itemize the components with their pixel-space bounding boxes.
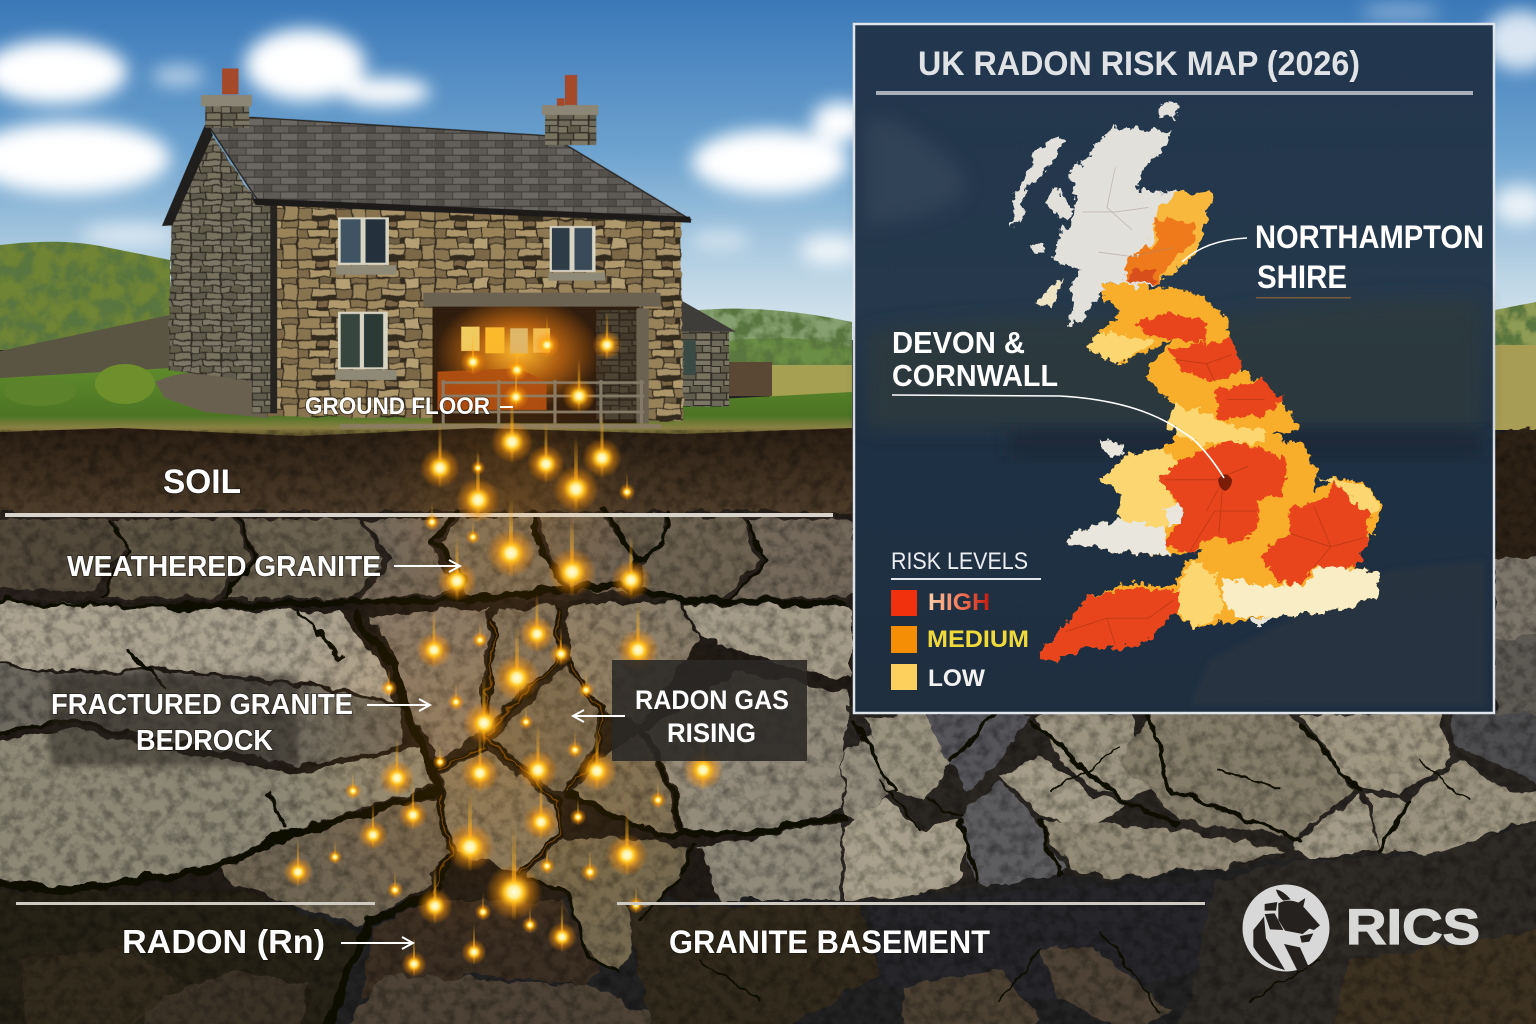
panel: UK radon risk map [854,24,1494,713]
callout: Northamptonshire: NORTHAMPTON [1255,219,1484,255]
fence [0,315,772,396]
panel title: UK RADON RISK MAP (2026) [918,45,1360,83]
radon glow cloud [270,300,730,950]
label: weathered granite with arrow: WEATHERED GRANITE [67,551,381,583]
map: very low risk areas [1070,495,1202,556]
map: islands south [1101,440,1273,626]
map: high risk areas [1039,312,1370,663]
legend item: medium: MEDIUM [927,626,1029,653]
fractured bedrock band [0,600,870,975]
callout: Devon and Cornwall [892,325,1224,478]
distant forest hills [0,242,1536,372]
callout: Devon and Cornwall: DEVON & [892,325,1025,360]
grass strip [0,368,852,436]
fields [770,345,1536,430]
gable wall [168,128,254,382]
map: marker pin [1218,474,1232,491]
label: radon gas rising with arrow [573,660,807,761]
porch opening [423,293,661,423]
label: radon with arrow: RADON (Rn) [122,923,325,960]
callout: Northamptonshire: SHIRE [1257,259,1347,295]
clouds [0,5,1536,265]
bushes and garden rocks [4,364,268,418]
callout: Northamptonshire [1182,219,1484,298]
map: Scotland and islands [1012,104,1182,324]
soil and strata divider [5,513,833,517]
map: low risk areas [1086,332,1381,627]
label: soil: SOIL [163,463,241,501]
logo: RICS: RICS [1346,899,1480,955]
icon: horse head roundel [1242,884,1330,972]
sky background [0,0,1536,340]
label: granite basement [617,902,1205,960]
extension [680,300,736,407]
label: fractured granite bedrock with arrow [50,674,430,766]
panel ghost landscape [866,119,1485,705]
right edge rock and soil [1495,428,1536,715]
panel title [876,45,1473,95]
legend item: low [891,664,985,692]
windows [335,217,605,380]
callout: Devon and Cornwall: CORNWALL [892,358,1058,393]
legend item: low: LOW [928,665,985,692]
weathered granite band [0,512,870,607]
grain texture overlay [0,430,1536,1024]
chimneys [201,68,598,145]
legend item: high [891,589,990,616]
rock cracks [0,510,1470,1021]
lit crack edges [433,610,603,894]
label: ground floor: GROUND FLOOR [305,393,490,420]
front wall [252,200,684,422]
map: England and Wales base [1039,283,1383,663]
map: county boundaries [1066,167,1364,645]
label: radon with arrow [16,902,413,960]
label: fractured granite bedrock with arrow: BEDROCK [136,725,273,757]
legend: risk levels [891,548,1041,692]
house [162,68,736,429]
roof [206,117,690,219]
doorstep [340,424,661,429]
logo: RICS [1242,884,1480,972]
label: granite basement: GRANITE BASEMENT [669,924,990,960]
rock strata [0,428,1536,1024]
label: radon gas rising with arrow: RISING [667,718,756,748]
label: fractured granite bedrock with arrow: FRACTURED GRANITE [51,689,353,721]
soil layer [0,428,852,530]
right lower rock shelf [840,705,1536,905]
radon gas particles [283,311,723,977]
granite basement [0,820,1536,1024]
legend: risk levels: RISK LEVELS [891,548,1028,575]
porch railing [441,380,644,423]
legend item: high: HIGH [928,589,990,616]
map: Scottish risk zones [1124,192,1213,283]
label: radon gas rising with arrow: RADON GAS [635,685,789,715]
map of UK [1012,104,1383,663]
